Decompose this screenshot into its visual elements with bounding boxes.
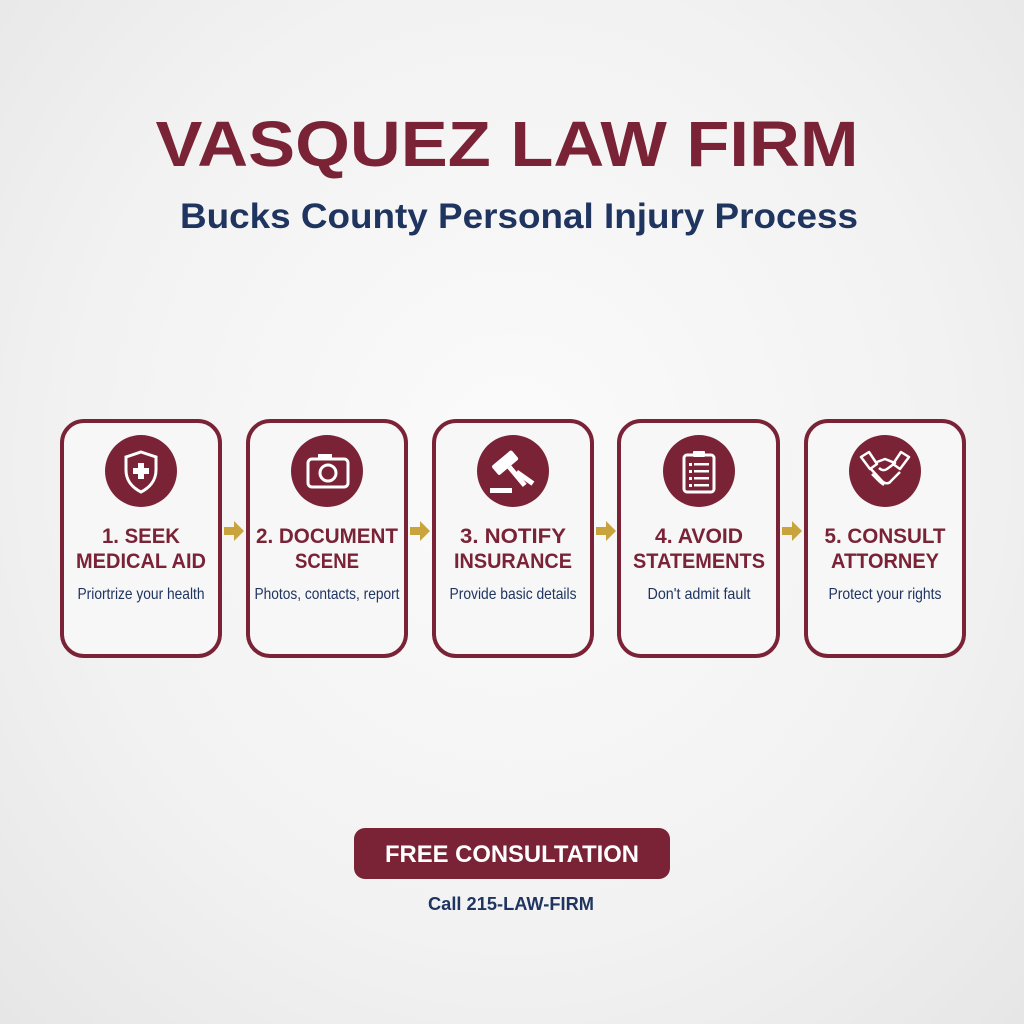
- step 3 card: Provide basic details: [450, 586, 576, 603]
- step 5 card: 5. CONSULT: [824, 525, 946, 548]
- step 5 card: Protect your rights: [828, 586, 942, 603]
- arrow 4: [782, 521, 802, 541]
- step 3 card: 3. NOTIFY: [460, 525, 566, 548]
- button: free consultation: [354, 828, 670, 879]
- step 4 card: STATEMENTS: [633, 550, 765, 573]
- step 4 card: 4. AVOID: [655, 525, 743, 548]
- title: VASQUEZ LAW FIRM: [156, 108, 858, 180]
- step 1 card: MEDICAL AID: [76, 550, 206, 573]
- button: free consultation: FREE CONSULTATION: [385, 841, 639, 868]
- step 2 card: Photos, contacts, report: [254, 586, 400, 603]
- step 5 card: ATTORNEY: [831, 550, 939, 573]
- step 4 card: [619, 421, 778, 656]
- step 5 card: [806, 421, 964, 656]
- arrow 3: [596, 521, 616, 541]
- step 2 card: SCENE: [295, 550, 359, 573]
- step 2 card: [248, 421, 406, 656]
- step 3 card: [434, 421, 592, 656]
- icon: clipboard: [663, 435, 735, 507]
- icon: shield with cross: [105, 435, 177, 507]
- subtitle: Bucks County Personal Injury Process: [180, 197, 858, 236]
- icon: handshake: [849, 435, 921, 507]
- icon: camera: [291, 435, 363, 507]
- step 3 card: INSURANCE: [454, 550, 572, 573]
- step 2 card: 2. DOCUMENT: [256, 525, 398, 548]
- arrow 2: [410, 521, 430, 541]
- step 1 card: Priortrize your health: [78, 586, 204, 603]
- icon: gavel: [477, 435, 549, 507]
- step 1 card: [62, 421, 220, 656]
- arrow 1: [224, 521, 244, 541]
- step 1 card: 1. SEEK: [102, 525, 180, 548]
- phone text: Call 215-LAW-FIRM: [428, 894, 594, 914]
- step 4 card: Don't admit fault: [648, 586, 751, 603]
